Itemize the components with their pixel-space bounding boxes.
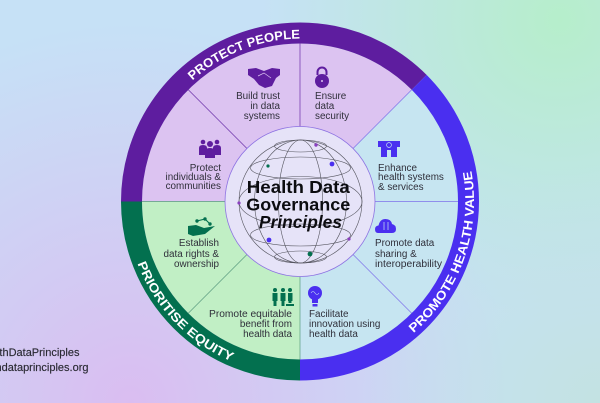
text: facilitate innovation: innovation using xyxy=(309,319,380,330)
icon: padlock xyxy=(315,68,329,88)
text: promote equitable benefit: benefit from xyxy=(240,319,292,330)
text: promote equitable benefit: Promote equitable xyxy=(209,309,293,320)
text: promote equitable benefit: health data xyxy=(243,329,293,340)
text: build trust: Build trust xyxy=(236,91,280,102)
segment: promote equitable benefit xyxy=(209,288,294,340)
band: protect people xyxy=(121,22,426,202)
text: establish data rights: Establish xyxy=(179,238,219,249)
text: protect individuals: individuals & xyxy=(166,172,221,183)
text: establish data rights: data rights & xyxy=(164,249,219,260)
text: facilitate innovation: health data xyxy=(309,329,358,340)
icon: handshake xyxy=(248,68,280,88)
segment: promote data sharing xyxy=(375,219,442,270)
text: promote data sharing: sharing & xyxy=(375,249,417,260)
text: protect individuals: Protect xyxy=(190,163,221,174)
icon: globe xyxy=(237,140,362,263)
segment: establish data rights xyxy=(164,217,220,270)
text: promote data sharing: Promote data xyxy=(375,238,435,249)
icon: people xyxy=(199,140,221,158)
text: enhance health systems: & services xyxy=(378,182,424,193)
band: protect people: PROTECT PEOPLE xyxy=(187,30,300,80)
text: protect individuals: communities xyxy=(166,181,221,192)
text: enhance health systems: health systems xyxy=(378,172,444,183)
text: promote data sharing: interoperability xyxy=(375,259,442,270)
icon: health facility xyxy=(378,141,400,157)
text: build trust: systems xyxy=(244,111,280,122)
segment: protect individuals xyxy=(166,140,221,192)
text: build trust: in data xyxy=(250,101,281,112)
segment: enhance health systems xyxy=(378,141,444,193)
text: ensure security: data xyxy=(315,101,335,112)
title: Governance xyxy=(246,194,350,214)
segment: ensure security xyxy=(315,68,349,122)
text: facilitate innovation: Facilitate xyxy=(309,309,349,320)
wheel segments xyxy=(142,44,458,360)
text: ensure security: Ensure xyxy=(315,91,347,102)
text: enhance health systems: Enhance xyxy=(378,163,417,174)
icon: light bulb xyxy=(308,286,322,306)
title: Health Data xyxy=(247,177,350,197)
title: Principles xyxy=(259,212,342,232)
band: promote health value xyxy=(300,74,479,380)
band: prioritise equity: PRIORITISE EQUITY xyxy=(138,261,235,360)
text: establish data rights: ownership xyxy=(174,259,220,270)
band: promote health value: PROMOTE HEALTH VALUE xyxy=(408,171,474,332)
segment: build trust xyxy=(236,68,281,122)
icon: hand with network xyxy=(188,217,215,236)
text: ensure security: security xyxy=(315,111,349,122)
band: prioritise equity xyxy=(121,202,300,380)
segment: facilitate innovation xyxy=(308,286,380,340)
centre circle xyxy=(225,126,375,276)
icon: three figures xyxy=(272,288,294,306)
icon: cloud xyxy=(375,219,396,233)
